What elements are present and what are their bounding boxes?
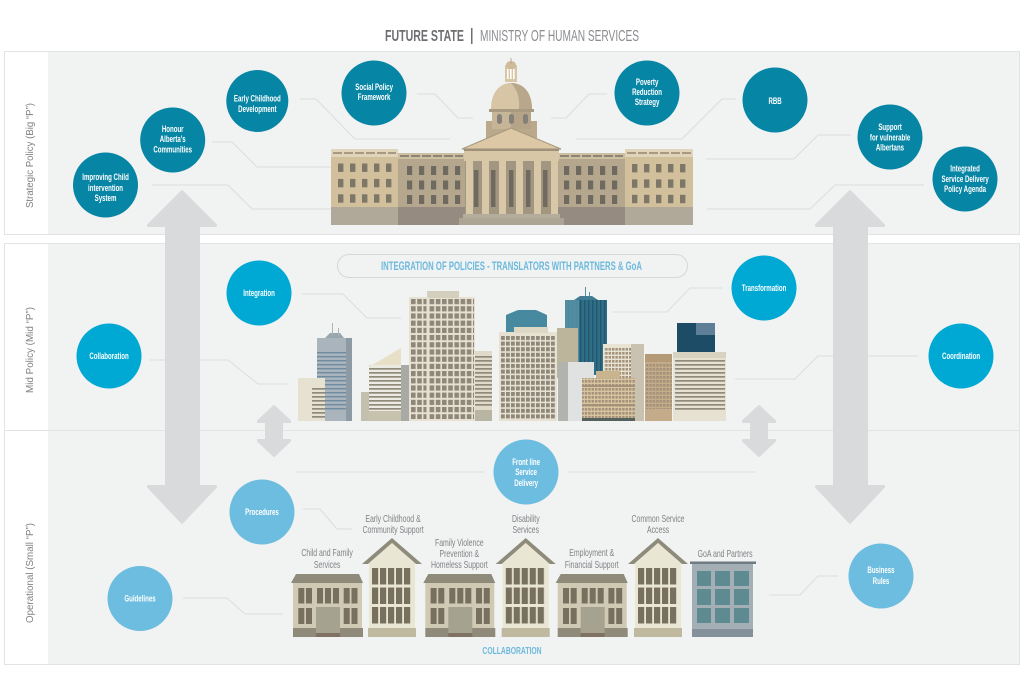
building: employment and financial support: Employment & xyxy=(569,547,614,558)
building: early childhood and community support xyxy=(362,513,424,637)
building: child and family services: Services xyxy=(314,559,341,570)
circle: coordination: Coordination xyxy=(942,351,980,361)
circle: poverty reduction strategy: Poverty xyxy=(636,77,659,87)
circle: early childhood development: Development xyxy=(238,104,277,114)
building: family violence prevention and homeless support xyxy=(423,537,495,637)
building: family violence prevention and homeless support: Prevention & xyxy=(440,548,479,559)
illustration: city skyline xyxy=(298,287,726,421)
circle: coordination xyxy=(928,324,994,388)
building: common service access: Access xyxy=(647,524,670,535)
circle: guidelines xyxy=(108,566,172,631)
circle: integration: Integration xyxy=(243,288,275,298)
arrow: right double arrow xyxy=(816,191,884,523)
illustration: legislature building xyxy=(331,58,693,225)
building: goa and partners xyxy=(690,548,756,637)
circle: honour alberta's communities: Communities xyxy=(153,144,192,155)
circle: procedures: Procedures xyxy=(245,507,279,517)
panel: mid policy: Mid Policy (Mid “P”) xyxy=(24,307,36,393)
arrow: small right double arrow xyxy=(743,406,775,456)
circle: business rules xyxy=(848,544,914,608)
circle: collaboration xyxy=(76,324,142,388)
circle: front line service delivery xyxy=(494,440,558,504)
circle: support for vulnerable albertans xyxy=(858,104,922,170)
circle: poverty reduction strategy: Strategy xyxy=(635,97,660,107)
panel: mid policy xyxy=(4,244,1020,430)
building: common service access: Common Service xyxy=(632,513,685,524)
circle: support for vulnerable albertans: for vulnerable xyxy=(870,132,911,143)
circle: integrated service delivery policy agenda: Service Delivery xyxy=(942,174,989,184)
building: child and family services xyxy=(291,547,363,637)
circle: early childhood development: Early Childhood xyxy=(234,93,281,104)
circle: improving child intervention system: System xyxy=(95,193,117,203)
circle: improving child intervention system xyxy=(73,152,138,218)
circle: social policy framework: Social Policy xyxy=(355,82,394,92)
dome xyxy=(486,58,537,138)
building: child and family services: Child and Family xyxy=(301,547,353,558)
circle: transformation: Transformation xyxy=(742,283,787,293)
circle: poverty reduction strategy xyxy=(614,60,680,126)
callout: integration of policies: INTEGRATION OF POLICIES - TRANSLATORS WITH PARTNERS & GoA xyxy=(381,261,642,273)
panel: operational: Operational (Small “P”) xyxy=(24,523,36,623)
building: early childhood and community support: Early Childhood & xyxy=(365,513,421,524)
building: employment and financial support xyxy=(556,547,628,637)
circle: business rules: Business xyxy=(867,565,895,575)
building: disability services xyxy=(496,513,556,637)
label: collaboration: COLLABORATION xyxy=(482,645,542,656)
circle: improving child intervention system: intervention xyxy=(88,183,123,193)
circle: collaboration: Collaboration xyxy=(89,351,129,361)
building: disability services: Services xyxy=(513,524,540,535)
callout: integration of policies xyxy=(338,254,688,278)
arrow: left double arrow xyxy=(148,191,216,523)
building: disability services: Disability xyxy=(512,513,540,524)
building: family violence prevention and homeless support: Family Violence xyxy=(435,537,484,548)
circle: guidelines: Guidelines xyxy=(124,593,156,604)
circle: RBB: RBB xyxy=(768,96,782,106)
circle: procedures xyxy=(230,480,294,544)
circle: improving child intervention system: Improving Child xyxy=(82,172,129,182)
circle: front line service delivery: Front line xyxy=(512,457,541,467)
arrow: small left double arrow xyxy=(258,406,290,456)
circle: social policy framework xyxy=(342,60,406,126)
panel: strategic policy xyxy=(4,52,1020,234)
circle: honour alberta's communities: Alberta’s xyxy=(160,134,186,144)
circle: front line service delivery: Delivery xyxy=(514,478,539,488)
circle: poverty reduction strategy: Reduction xyxy=(632,87,662,97)
circle: front line service delivery: Service xyxy=(515,467,538,477)
circle: integration xyxy=(226,260,292,326)
title: FUTURE STATE xyxy=(385,28,464,45)
circle: integrated service delivery policy agenda xyxy=(932,146,998,212)
portico xyxy=(459,128,564,225)
circle: social policy framework: Framework xyxy=(358,92,391,102)
circle: honour alberta's communities: Honour xyxy=(162,124,184,134)
circle: support for vulnerable albertans: Support xyxy=(878,122,902,132)
circle: early childhood development xyxy=(226,70,288,132)
connector lines xyxy=(150,94,924,614)
title: MINISTRY OF HUMAN SERVICES xyxy=(480,28,639,45)
circle: business rules: Rules xyxy=(873,576,889,586)
building: goa and partners: GoA and Partners xyxy=(698,548,753,559)
title xyxy=(385,28,639,45)
circle: integrated service delivery policy agenda: Integrated xyxy=(950,163,980,174)
building: common service access xyxy=(628,513,688,637)
circle: honour alberta's communities xyxy=(140,108,205,172)
panel: strategic policy: Strategic Policy (Big “P”) xyxy=(24,103,36,208)
building: employment and financial support: Financial Support xyxy=(565,559,619,570)
circle: support for vulnerable albertans: Albertans xyxy=(876,142,904,153)
circle: RBB xyxy=(742,68,808,132)
building: family violence prevention and homeless support: Homeless Support xyxy=(431,559,488,570)
circle: transformation xyxy=(732,256,796,320)
building: early childhood and community support: Community Support xyxy=(363,524,424,535)
circle: integrated service delivery policy agenda: Policy Agenda xyxy=(944,184,987,194)
